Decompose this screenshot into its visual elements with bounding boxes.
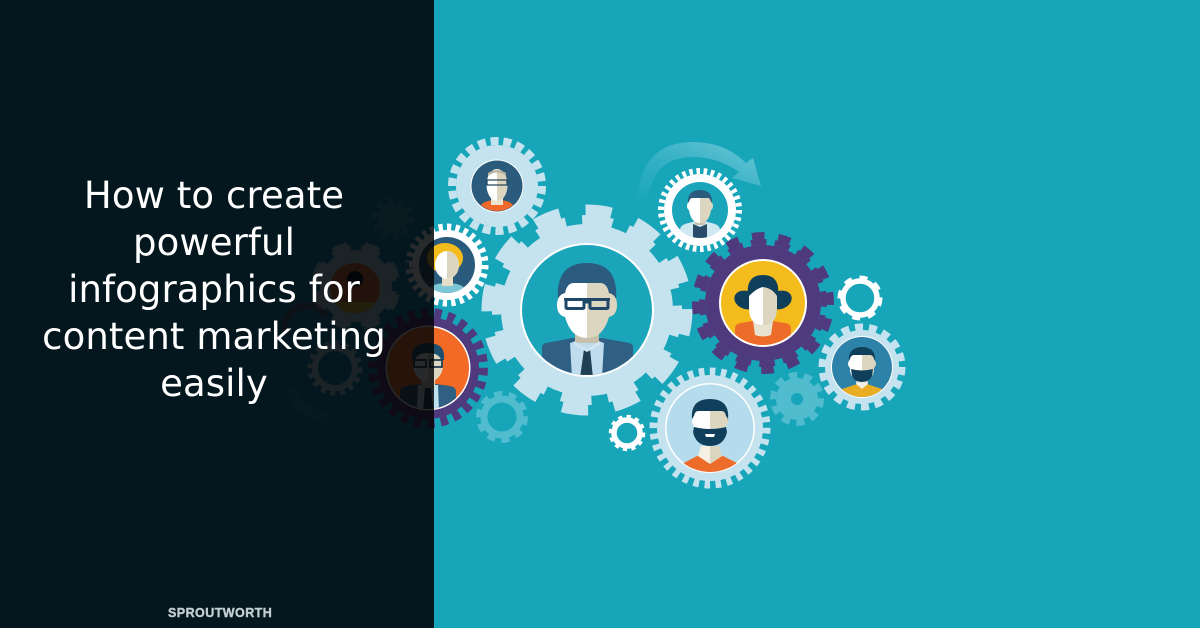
person: hair (558, 263, 616, 301)
underlay for left panel (0, 0, 434, 628)
title: How to create (84, 174, 344, 217)
person: face (557, 283, 587, 338)
faint gear: left large (314, 244, 398, 328)
brand label: SPROUTWORTH (168, 606, 272, 620)
gear: white with woman (409, 227, 485, 303)
title: easily (160, 362, 268, 405)
title: content marketing (42, 315, 386, 358)
faint arc: lower left (290, 388, 326, 417)
faint gear: hollow lower (310, 343, 360, 393)
gear: purple left with orange (373, 313, 483, 423)
faint gear: purple far left (285, 306, 326, 335)
gear: pale right with bearded man on blue (822, 327, 902, 407)
title: infographics for (68, 268, 360, 311)
gear: white top with man in vest (661, 171, 739, 249)
title: powerful (133, 221, 295, 264)
gear: small white ring right (840, 278, 880, 318)
faint gear: top small (375, 200, 411, 236)
gear: top left with person (452, 141, 542, 231)
dark left panel overlay (0, 0, 434, 628)
gear: bottom with bearded man (654, 372, 766, 484)
gear: purple right with woman on yellow (692, 232, 834, 374)
gear: light teal solid (773, 375, 821, 423)
person: suit (542, 338, 633, 379)
person: glasses (566, 300, 608, 308)
arrow: curved light arrow (637, 142, 761, 202)
gear: small light teal lower left (479, 394, 525, 440)
gear: small white lower (610, 416, 644, 450)
gear: main central with man in suit (482, 204, 692, 416)
title (42, 174, 386, 405)
